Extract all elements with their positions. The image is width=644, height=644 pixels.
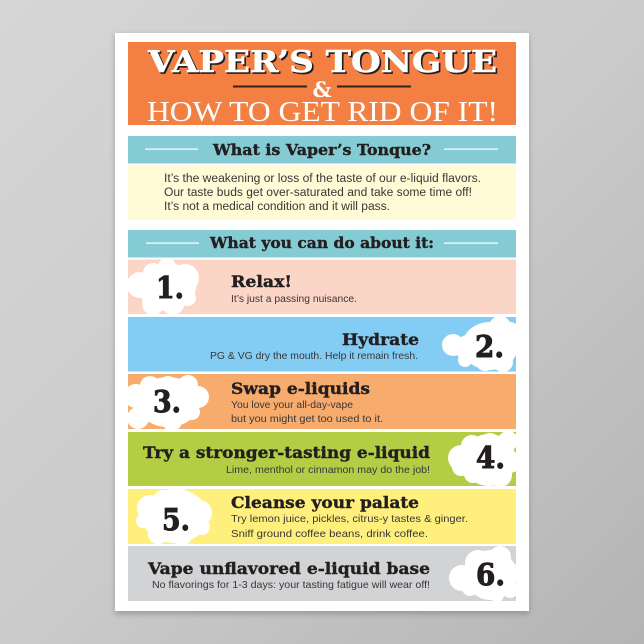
heading: What is Vaper's Tonque: What is Vaper’s Tonque? <box>212 141 431 159</box>
step 4 text: Lime, menthol or cinnamon may do the job! <box>226 464 430 476</box>
heading: What you can do about it <box>128 230 516 258</box>
panel: definition <box>128 165 516 220</box>
poster sheet <box>115 33 529 611</box>
subtitle: HOW TO GET RID OF IT! <box>147 97 498 128</box>
cloud 4 <box>448 432 516 486</box>
step 2 heading: Hydrate <box>342 330 419 349</box>
panel: definition: It’s the weakening or loss of the taste of our e-liquid flavors. <box>164 173 481 185</box>
cloud 1 <box>124 258 199 315</box>
poster shadow <box>115 35 529 614</box>
title shadow: VAPER’S TONGUE <box>148 46 498 82</box>
step 4 heading: Try a stronger-tasting e-liquid <box>143 443 430 462</box>
cloud 3 <box>124 375 209 431</box>
number 5: 5. <box>162 503 190 538</box>
panel: step 6 <box>128 546 520 602</box>
number 4: 4. <box>476 441 505 476</box>
step 5 text <box>231 513 468 540</box>
step 5 text: Try lemon juice, pickles, citrus-y tastes & ginger. <box>231 513 468 525</box>
step 3 heading: Swap e-liquids <box>231 379 370 398</box>
step 1 heading: Relax! <box>231 272 292 291</box>
step 3 text: You love your all-day-vape <box>231 399 353 411</box>
step 1 text: It’s just a passing nuisance. <box>231 293 357 305</box>
panel: step 2 <box>128 316 523 372</box>
ampersand divider: & <box>313 77 332 102</box>
step 6 text: No flavorings for 1-3 days: your tasting fatigue will wear off! <box>152 579 430 591</box>
panel: definition: It’s not a medical condition and it will pass. <box>164 201 390 213</box>
step 2 text: PG & VG dry the mouth. Help it remain fresh. <box>210 350 418 362</box>
step 3 text <box>231 399 383 425</box>
panel: step 5 <box>128 488 516 546</box>
cloud 2 <box>442 317 516 372</box>
step 3 text: but you might get too used to it. <box>231 413 383 425</box>
step 5 text: Sniff ground coffee beans, drink coffee. <box>231 528 428 540</box>
number 2: 2. <box>475 330 504 365</box>
heading: What you can do about it: What you can do about it: <box>209 234 434 252</box>
panel: title banner <box>128 42 516 128</box>
panel: definition: Our taste buds get over-saturated and take some time off! <box>164 187 472 199</box>
cloud 6 <box>449 546 520 602</box>
panel: step 3 <box>124 374 516 431</box>
heading: What is Vaper's Tonque <box>128 136 516 164</box>
step 6 heading: Vape unflavored e-liquid base <box>147 559 430 578</box>
number 3: 3. <box>153 385 181 420</box>
title: Vaper's Tongue: VAPER’S TONGUE <box>147 45 497 80</box>
panel: step 1 <box>124 258 516 315</box>
panel: step 4 <box>128 431 523 487</box>
number 6: 6. <box>476 558 505 593</box>
step 5 heading: Cleanse your palate <box>231 493 419 512</box>
number 1: 1. <box>156 271 184 306</box>
cloud 5 <box>136 488 212 546</box>
